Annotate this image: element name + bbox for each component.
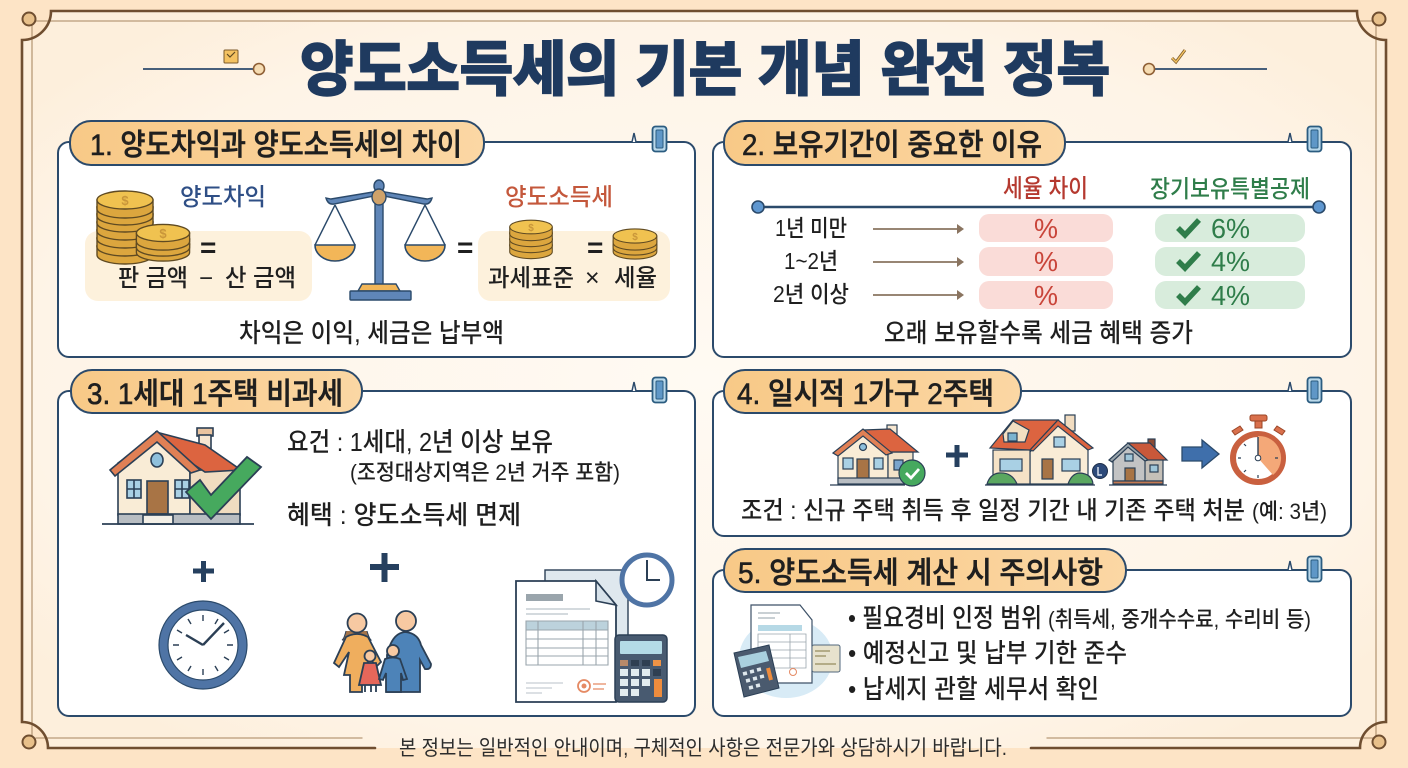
icon: house A with badge: [830, 425, 925, 486]
clip 2: [1285, 126, 1322, 152]
row: under 1 year: [775, 213, 1305, 244]
coin stack small: $: [528, 223, 534, 234]
summary 2: 오래 보유할수록 세금 혜택 증가: [884, 318, 1193, 348]
condition text: 조건 : 신규 주택 취득 후 일정 기간 내 기존 주택 처분: [741, 497, 1245, 525]
icon: house C: [1109, 439, 1167, 485]
requirement note: (조정대상지역은 2년 거주 포함): [350, 460, 620, 485]
panel: 5 cautions: [713, 549, 1351, 716]
coin stack large: $: [121, 193, 129, 208]
row: 1 to 2 years: %: [1034, 246, 1058, 277]
plus 2: [370, 553, 399, 582]
equals left: =: [200, 232, 216, 263]
heading 5: 5. 양도소득세 계산 시 주의사항: [738, 557, 1103, 590]
column header: rate: 세율 차이: [1003, 175, 1088, 203]
bullet 1: [848, 603, 1311, 633]
row: under 1 year: %: [1034, 213, 1058, 244]
title ornament left: [143, 50, 264, 74]
coin stack small: [510, 220, 552, 259]
requirement: 요건 : 1세대, 2년 이상 보유: [287, 427, 553, 457]
icon: family: [334, 611, 431, 692]
label: tax: 양도소득세: [505, 184, 613, 211]
benefit: 혜택 : 양도소득세 면제: [287, 500, 521, 530]
coin stack large: [97, 191, 190, 264]
panel: 4 temporary two houses: [713, 370, 1351, 536]
coin pile small: [613, 229, 657, 259]
formula: sale minus purchase: 판 금액: [118, 265, 188, 292]
icon: small round tag: [1092, 464, 1108, 478]
bullet 1: • 필요경비 인정 범위: [848, 603, 1042, 633]
row: 1 to 2 years: 1~2년: [784, 248, 838, 274]
formula: sale minus purchase: −: [199, 265, 213, 292]
panel: 2 holding period: [713, 121, 1351, 357]
icon: clock: [159, 601, 247, 689]
formula: tax base times rate: [488, 264, 657, 292]
title ornament right: [1144, 50, 1267, 74]
row: 1 to 2 years: [784, 246, 1305, 277]
formula: sale minus purchase: 산 금액: [225, 265, 296, 292]
icon: documents, calculator, card: [734, 605, 840, 698]
icon: house with check: [102, 428, 254, 524]
icon: documents and calculator: [516, 555, 672, 702]
icon: stopwatch: [1232, 415, 1285, 482]
clip 3: [630, 378, 666, 402]
formula: tax base times rate: 과세표준: [488, 265, 574, 292]
icon: house B: [985, 415, 1095, 485]
formula: sale minus purchase: [118, 265, 296, 292]
row: over 2 years: %: [1034, 280, 1058, 311]
row: over 2 years: [773, 280, 1305, 311]
column header: deduction: 장기보유특별공제: [1150, 176, 1310, 203]
formula: tax base times rate: ×: [585, 264, 600, 292]
condition text: (예: 3년): [1252, 499, 1327, 524]
icon: arrow: [1182, 440, 1219, 468]
clip 5: [1285, 556, 1322, 582]
coin pile small: $: [632, 232, 638, 243]
heading 3: 3. 1세대 1주택 비과세: [87, 378, 343, 411]
clip 4: [1285, 378, 1322, 402]
row: over 2 years: 2년 이상: [773, 281, 849, 307]
row: under 1 year: 6%: [1211, 213, 1250, 244]
bullet 3: • 납세지 관할 세무서 확인: [848, 674, 1099, 704]
coin stack large: $: [159, 226, 167, 241]
panel: 3 one-household exemption: [58, 370, 695, 716]
formula background right: [478, 231, 670, 301]
equals right: =: [587, 232, 603, 263]
plus 1: [193, 561, 214, 582]
heading 1: 1. 양도차익과 양도소득세의 차이: [90, 129, 462, 162]
clip 1: [630, 126, 666, 152]
formula: tax base times rate: 세율: [614, 265, 657, 292]
title: 양도소득세의 기본 개념 완전 정복: [300, 37, 1110, 103]
summary 1: 차익은 이익, 세금은 납부액: [239, 318, 504, 348]
plus 3: [946, 445, 968, 467]
row: over 2 years: 4%: [1211, 280, 1250, 311]
heading 2: 2. 보유기간이 중요한 이유: [742, 129, 1042, 162]
formula background left: [85, 231, 312, 301]
row: under 1 year: 1년 미만: [775, 215, 847, 241]
heading 4: 4. 일시적 1가구 2주택: [737, 378, 994, 411]
icon: balance scale: [315, 180, 445, 300]
row: 1 to 2 years: 4%: [1211, 246, 1250, 277]
footer note: 본 정보는 일반적인 안내이며, 구체적인 사항은 전문가와 상담하시기 바랍니다.: [399, 737, 1007, 760]
icon: big check: [186, 457, 261, 519]
bullet 1: (취득세, 중개수수료, 수리비 등): [1048, 607, 1311, 632]
timeline: [752, 201, 1325, 213]
label: gain: 양도차익: [180, 184, 266, 211]
heading 1: [70, 121, 484, 165]
equals center: =: [457, 232, 473, 263]
panel: 1 difference between gain and tax: [58, 121, 695, 357]
bullet 2: • 예정신고 및 납부 기한 준수: [848, 638, 1127, 668]
